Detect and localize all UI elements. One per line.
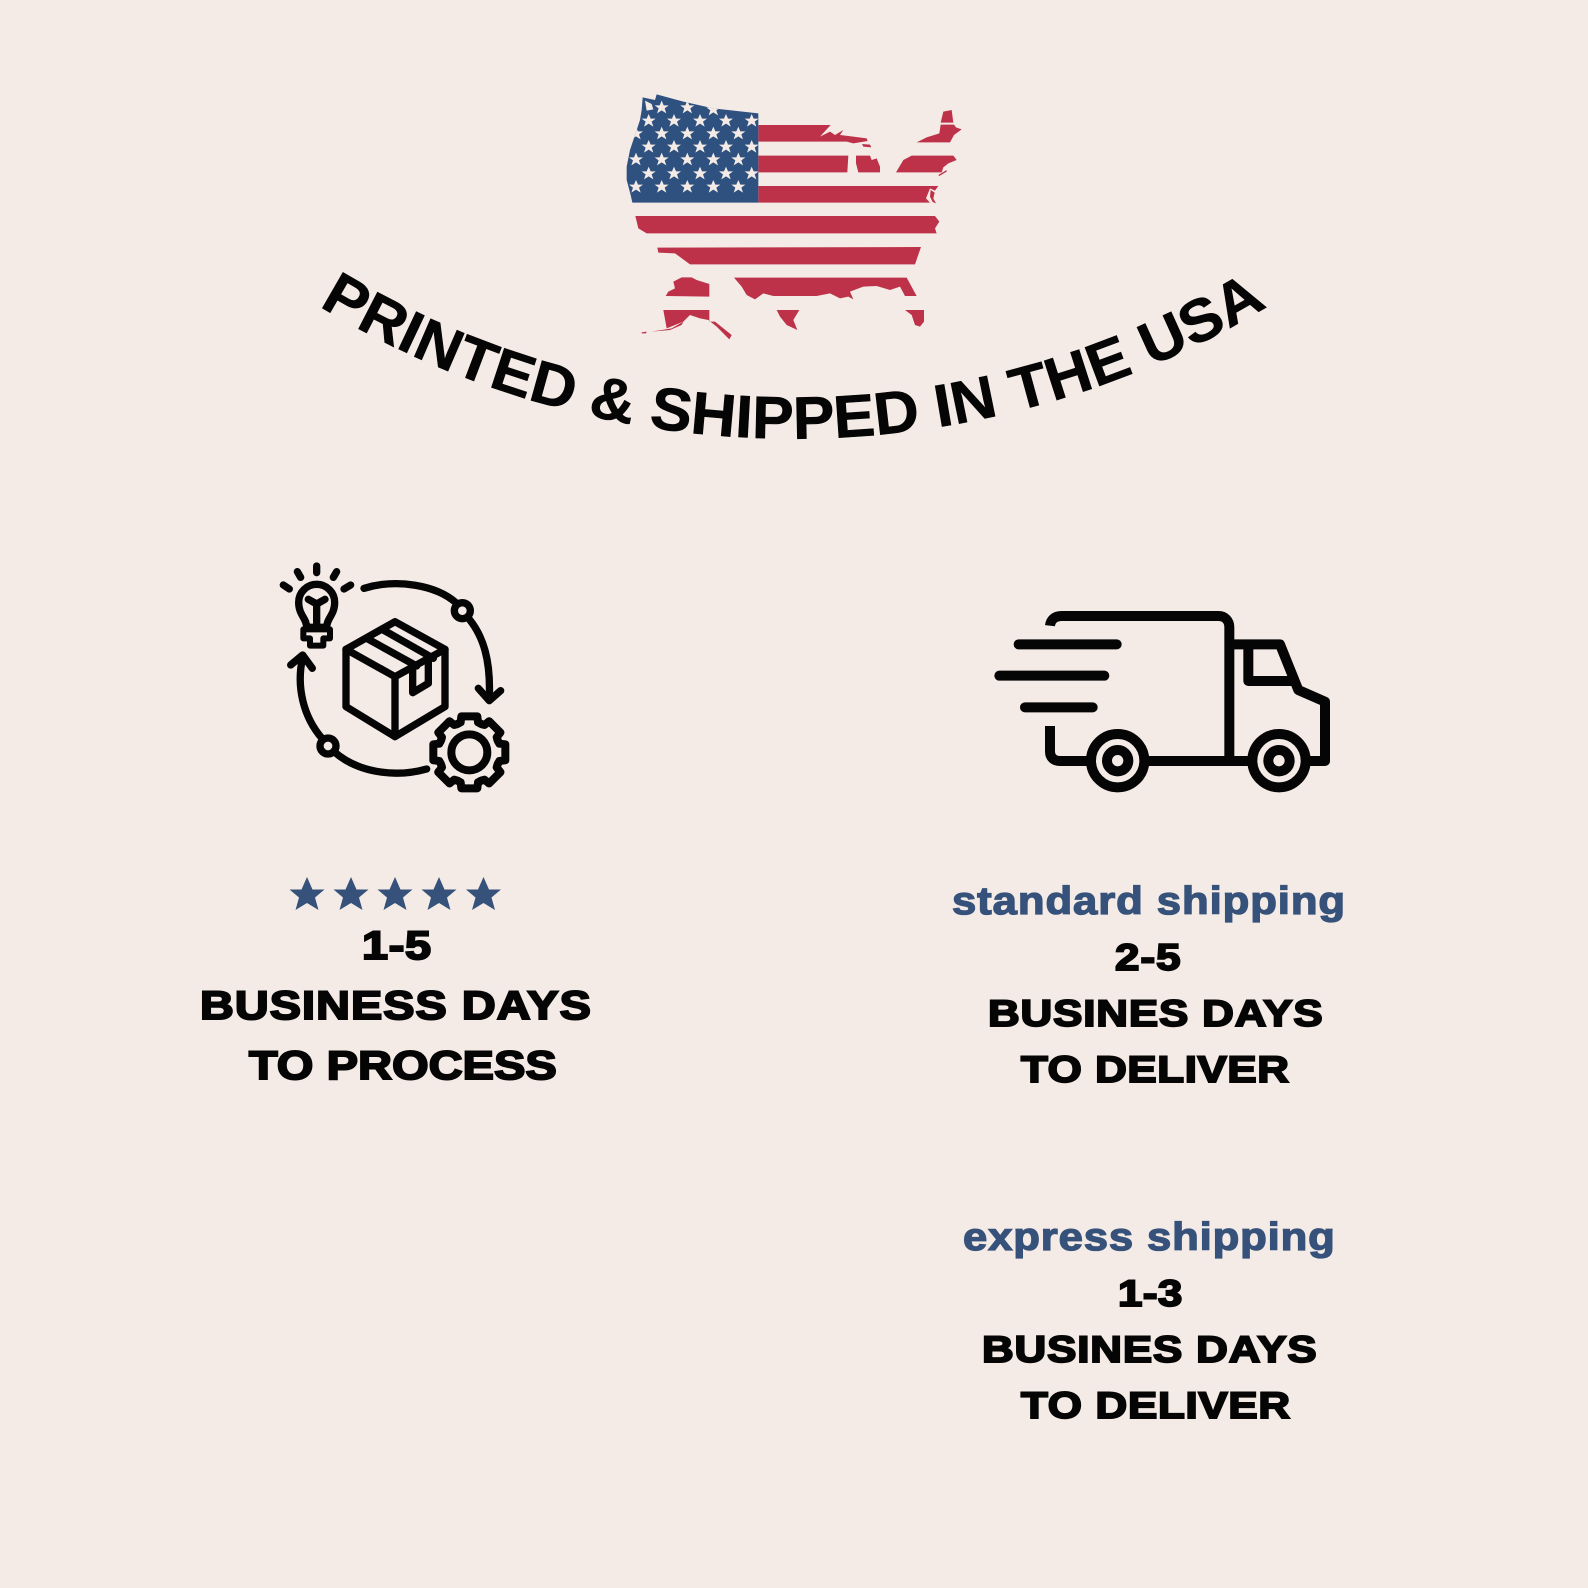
text: standard shipping: standard shipping	[952, 879, 1345, 922]
icon: box with process cycle	[283, 566, 505, 788]
text: standard shipping: TO DELIVER	[1021, 1048, 1289, 1090]
icon part: package	[346, 622, 445, 737]
rating stars	[290, 877, 501, 910]
flag stars	[629, 101, 759, 193]
text: express shipping: BUSINES DAYS	[982, 1328, 1317, 1370]
text: express shipping: express shipping	[963, 1215, 1335, 1258]
text: processing time: TO PROCESS	[249, 1044, 557, 1088]
text: processing time: BUSINESS DAYS	[200, 984, 591, 1028]
icon: delivery truck	[999, 616, 1325, 787]
text: standard shipping	[952, 879, 1345, 1090]
text: processing time: 1-5	[362, 924, 431, 968]
text: standard shipping: 2-5	[1115, 936, 1181, 978]
icon part: cycle arrows	[291, 584, 501, 773]
icon part: gear	[433, 716, 505, 788]
text: processing time	[200, 924, 591, 1088]
text: express shipping: 1-3	[1118, 1272, 1182, 1314]
icon part: light bulb	[283, 566, 351, 646]
icon: USA flag map	[627, 94, 962, 339]
text: express shipping	[963, 1215, 1335, 1426]
text: express shipping: TO DELIVER	[1021, 1384, 1290, 1426]
text: standard shipping: BUSINES DAYS	[988, 992, 1323, 1034]
title: curved heading: PRINTED & SHIPPED IN THE USA	[322, 272, 1267, 440]
